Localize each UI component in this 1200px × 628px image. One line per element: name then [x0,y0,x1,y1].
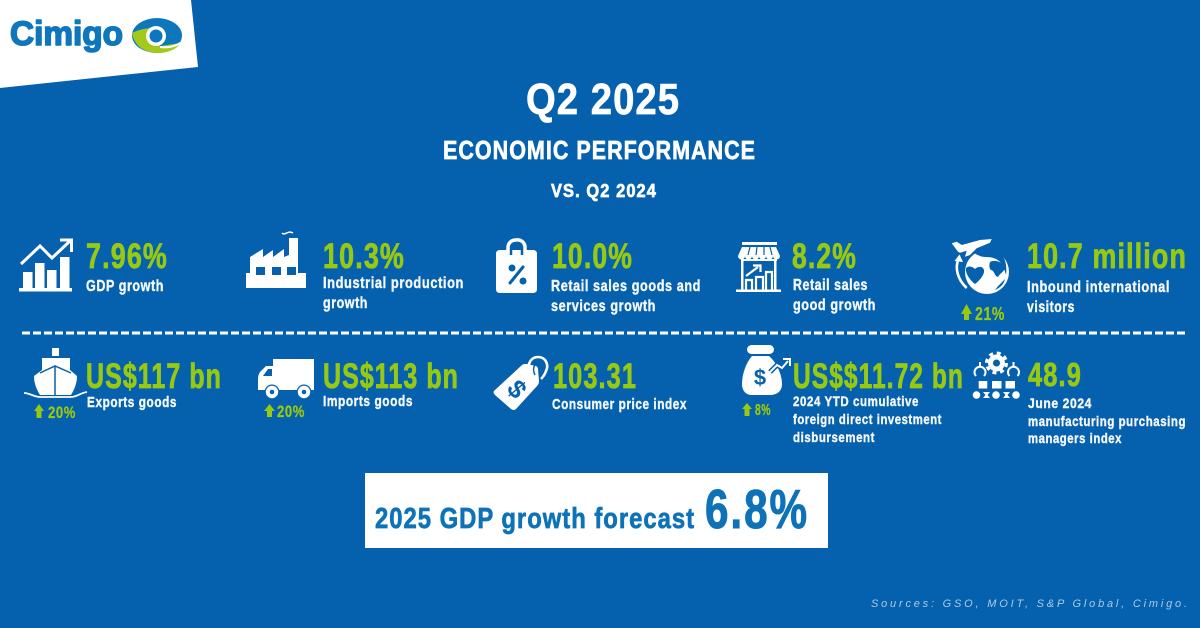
icon: money bag with arrow: $ [754,365,766,390]
logo: Cimigo [0,0,198,88]
label [1028,395,1186,446]
label: GDP growth [86,278,164,295]
label: good growth [793,297,876,314]
panel: exports goods [24,348,222,422]
change: up 20%: 20% [277,402,305,421]
callout: GDP forecast: 2025 GDP growth forecast [375,503,695,535]
icon: plane circling globe [952,239,1009,294]
label: Retail sales [793,277,868,294]
label [551,278,701,315]
change: up 20%: 20% [48,403,76,422]
label: disbursement [793,429,875,445]
value: 8.2% [792,237,857,276]
label [1027,279,1170,316]
label: Imports goods [323,394,413,410]
change: up 8% [742,402,771,419]
value: 10.3% [323,237,405,276]
label: 2024 YTD cumulative [793,393,919,409]
panel: industrial production [246,232,464,312]
change: up 20% [264,402,305,421]
label: foreign direct investment [793,411,942,427]
icon: factory [246,232,306,288]
label: visitors [1027,299,1075,316]
panel: foreign direct investment [742,345,964,445]
value: 7.96% [86,237,168,276]
label [323,275,464,312]
change: up 8%: 8% [755,402,771,419]
label: Consumer price index [552,397,687,413]
icon: money bag with arrow [742,345,790,395]
callout: GDP forecast [365,473,828,548]
value: US$117 bn [86,357,222,396]
label: Retail sales goods and [551,278,701,295]
label: services growth [551,298,656,315]
icon: shopping bag with percent [496,240,537,293]
panel: manufacturing purchasing managers index [973,353,1186,446]
value: 103.31 [553,357,637,396]
title: Q2 2025 [526,75,680,124]
panel: GDP growth [19,237,168,295]
icon: price tag with dollar [494,357,547,410]
label: growth [323,295,368,312]
icon: cargo ship [24,348,87,397]
label: June 2024 [1028,395,1092,411]
icon: delivery truck [258,359,314,400]
icon: bar chart with rising arrow [19,240,72,292]
comparison note: VS. Q2 2024 [551,181,657,201]
change: up 21%: 21% [975,304,1005,324]
label: Industrial production [323,275,464,292]
subtitle: ECONOMIC PERFORMANCE [443,135,756,165]
label: Inbound international [1027,279,1170,296]
panel: retail sales good growth [736,237,876,314]
logo: Cimigo: Cimigo [10,15,123,53]
icon: storefront with chart [736,242,781,292]
icon: price tag with dollar: $ [501,374,533,405]
change: up 20% [34,403,76,422]
panel: retail sales goods and services [496,237,701,315]
panel: imports goods [258,357,459,421]
sources note: Sources: GSO, MOIT, S&P Global, Cimigo. [871,598,1187,610]
label [793,277,876,314]
label: Exports goods [87,395,177,411]
value: US$113 bn [323,357,459,396]
value: 10.0% [552,237,633,276]
panel: inbound international visitors [952,237,1187,324]
label [793,393,942,445]
panel: consumer price index [494,357,687,413]
value: US$$11.72 bn [793,357,964,396]
icon: gear, robot arms and conveyor [973,353,1020,399]
value: 48.9 [1028,356,1082,393]
callout: GDP forecast: 6.8% [705,478,809,540]
label: managers index [1028,430,1122,446]
change: up 21% [961,304,1005,324]
